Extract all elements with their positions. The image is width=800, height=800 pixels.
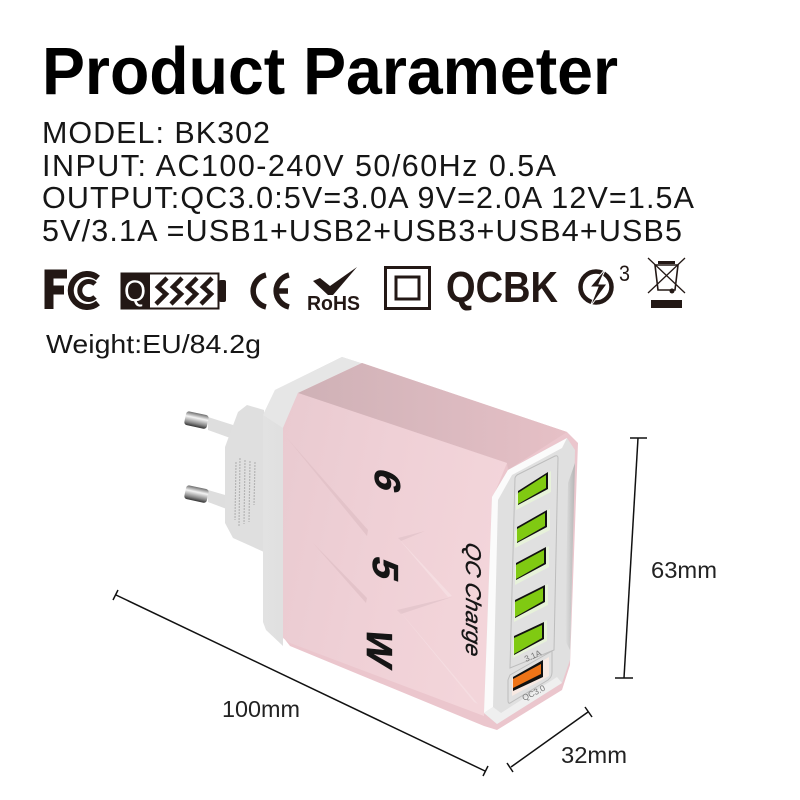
icon: quick charge bolt [580, 261, 630, 307]
icon: RoHS mark: RoHS [307, 293, 360, 315]
charger illustration [184, 357, 578, 730]
EU plug [184, 405, 264, 552]
icon: quick charge bolt: 3 [619, 261, 630, 286]
dimension: 100mm length: 100mm [222, 696, 300, 722]
specification text block [42, 116, 695, 248]
icon: RoHS mark [307, 267, 360, 315]
specification text block: INPUT: AC100-240V 50/60Hz 0.5A [42, 149, 557, 183]
port QC3.0 [512, 657, 549, 696]
printed QC Charge: QC Charge [461, 540, 485, 659]
label QC3.0: QC3.0 [520, 683, 547, 703]
weight text: Weight:EU/84.2g [46, 329, 261, 359]
port 3 [515, 546, 549, 585]
dimension: 32mm depth: 32mm [561, 742, 627, 768]
icon: QCBK label: QCBK [446, 263, 558, 312]
printed 65W [358, 464, 406, 673]
icon: WEEE crossed bin [648, 258, 685, 308]
icon: QC battery [121, 273, 226, 309]
face creases [287, 438, 478, 704]
specification text block: MODEL: BK302 [42, 116, 270, 150]
white rear band [263, 357, 370, 646]
pink outer shell [283, 363, 578, 730]
icon: CE mark [253, 275, 289, 307]
icon: QC battery: Q [124, 275, 146, 308]
certification icons row [49, 258, 685, 315]
port 4 [514, 584, 548, 622]
front port panel [484, 438, 575, 724]
pink top bevel [298, 363, 567, 470]
dimension: 63mm height: 63mm [651, 557, 717, 583]
port 5 [513, 620, 547, 658]
specification text block: OUTPUT:QC3.0:5V=3.0A 9V=2.0A 12V=1.5A [42, 181, 695, 215]
USB ports [512, 471, 551, 703]
port 1 [516, 471, 551, 510]
dimension: 32mm depth [507, 707, 627, 772]
icon: double insulation square [386, 268, 430, 308]
printed 65W: W [358, 623, 398, 673]
dimension: 100mm length [113, 590, 488, 776]
port 2 [515, 509, 550, 548]
pink main face [283, 393, 507, 716]
printed 65W: 5 [364, 552, 404, 586]
printed 65W: 6 [366, 464, 406, 498]
dimension: 63mm height [615, 438, 717, 678]
label 3.1A: 3.1A [523, 647, 543, 664]
icon: FC mark [49, 274, 98, 309]
specification text block: 5V/3.1A =USB1+USB2+USB3+USB4+USB5 [42, 214, 682, 248]
title: Product Parameter [42, 34, 618, 109]
